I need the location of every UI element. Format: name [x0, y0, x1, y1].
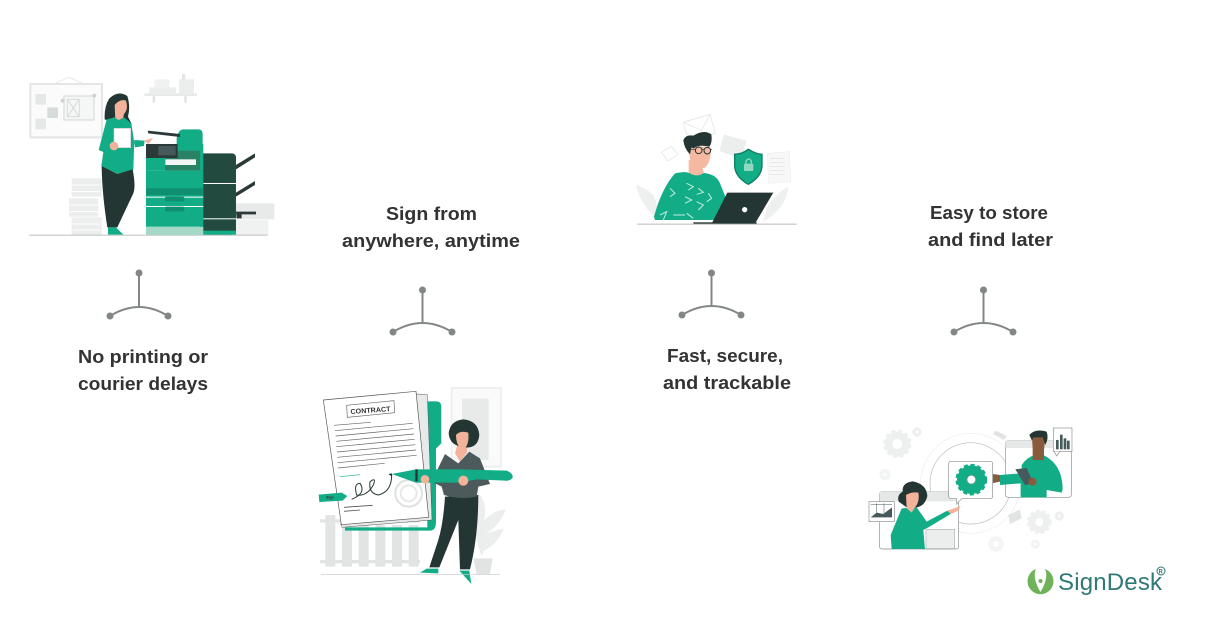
floor [29, 234, 268, 237]
background gears and circles [881, 429, 1062, 549]
laptop [693, 193, 773, 224]
left chart bubble [869, 502, 894, 522]
contract page: CONTRACT [350, 406, 391, 416]
caption 2 [342, 203, 520, 251]
connector 1 [106, 270, 172, 320]
caption 4 [928, 202, 1053, 250]
printer body [146, 129, 203, 235]
woman [420, 419, 490, 584]
background icons [661, 114, 791, 183]
sign here tag [319, 493, 347, 502]
illustration: two people with gear [869, 428, 1072, 549]
caption 4: Easy to store [930, 202, 1048, 223]
connector 3 [678, 270, 744, 318]
plant [473, 493, 506, 574]
caption 2: Sign from [386, 203, 477, 224]
caption 1: courier delays [78, 373, 208, 394]
wordmark: SignDesk [1058, 569, 1163, 596]
left window [879, 481, 961, 549]
registered mark: R [1158, 570, 1164, 576]
picture frame [452, 388, 501, 467]
sign here tag: Sign [326, 496, 334, 500]
connector 2 [390, 286, 456, 336]
caption 1 [78, 346, 208, 394]
back page [341, 394, 432, 527]
illustration: man at laptop with shield [636, 114, 797, 225]
wall board [30, 77, 102, 137]
leaves [636, 185, 788, 222]
connector 4 [950, 286, 1016, 336]
pen [388, 469, 513, 486]
icon: pen nib [1028, 569, 1054, 594]
icon: shield lock [735, 149, 762, 184]
illustration: woman signing contract [319, 388, 513, 584]
caption 3: and trackable [663, 372, 791, 393]
logo: SignDesk [1028, 567, 1165, 596]
green folder [345, 401, 441, 531]
radiator [320, 515, 420, 567]
caption 2: anywhere, anytime [342, 230, 520, 251]
printer side unit [200, 153, 256, 235]
right chart bubble [1053, 428, 1072, 456]
paper tray right [236, 203, 274, 235]
caption 4: and find later [928, 229, 1053, 250]
illustration: woman at printer [29, 74, 274, 236]
desk line [637, 223, 797, 226]
paper stack [69, 178, 102, 235]
person [654, 132, 727, 220]
gear bubble [949, 461, 993, 504]
shelf [144, 74, 197, 103]
right window [988, 431, 1071, 497]
woman [99, 93, 153, 235]
caption 3 [663, 345, 791, 393]
caption 3: Fast, secure, [667, 345, 783, 366]
contract page [323, 391, 429, 525]
caption 1: No printing or [78, 346, 208, 367]
floor [321, 573, 500, 576]
